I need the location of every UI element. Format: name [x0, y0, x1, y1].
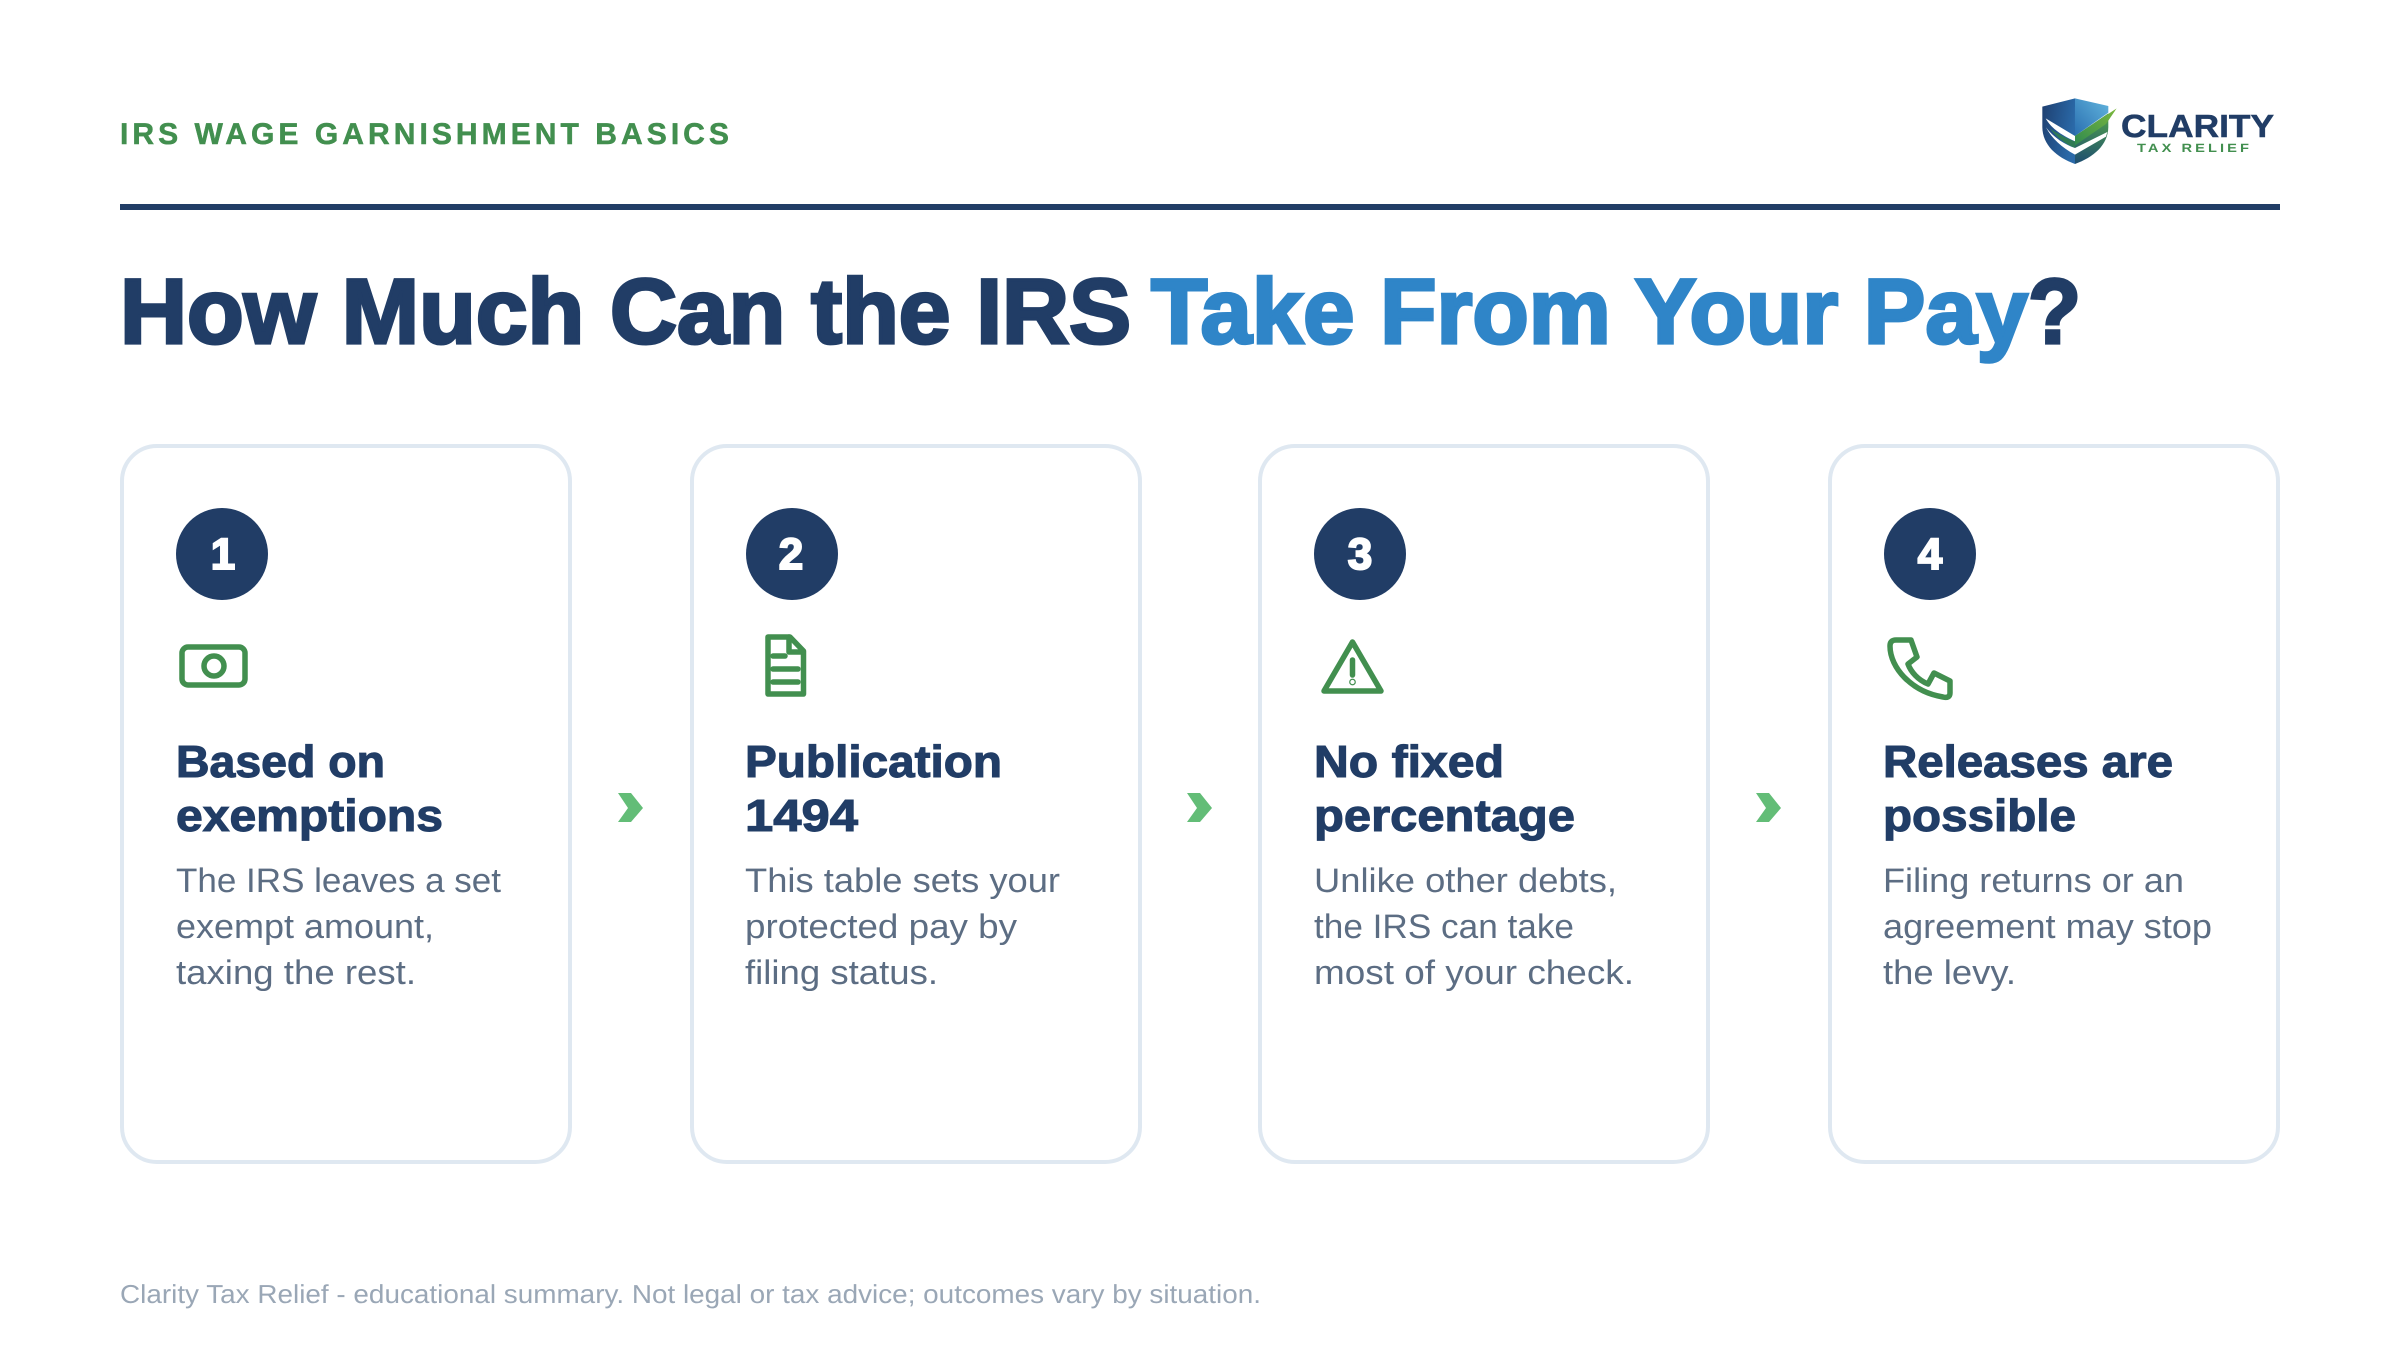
heading: publication 1494: 1494 — [745, 790, 858, 841]
step number 1 — [176, 508, 268, 600]
heading: releases are possible — [1883, 736, 2173, 841]
body text: taxing the rest. — [176, 954, 416, 992]
step number 3: 3 — [1348, 530, 1372, 579]
step number 4 — [1884, 508, 1976, 600]
body text: exempt amount, — [176, 908, 434, 946]
body text: most of your check. — [1314, 954, 1634, 992]
heading: releases are possible: possible — [1883, 790, 2076, 841]
title: ? — [2028, 261, 2081, 363]
body text — [1314, 862, 1634, 992]
arrow 2 — [1187, 793, 1212, 822]
heading: no fixed percentage: No fixed — [1314, 736, 1504, 787]
step number 3 — [1314, 508, 1406, 600]
title: How Much Can the IRS — [120, 261, 1131, 363]
arrow 3 — [1756, 793, 1781, 822]
panel: step 2 — [692, 446, 1140, 1162]
body text: protected pay by — [745, 908, 1017, 946]
title: Take From Your Pay — [1151, 261, 2028, 363]
body text: Filing returns or an — [1883, 862, 2184, 900]
title — [120, 261, 2081, 363]
heading: publication 1494: Publication — [745, 736, 1002, 787]
body text — [1883, 862, 2212, 992]
logo tagline: TAX RELIEF — [2137, 141, 2252, 155]
body text — [176, 862, 502, 992]
body text: Unlike other debts, — [1314, 862, 1617, 900]
heading: based on exemptions: exemptions — [176, 790, 443, 841]
panel: step 3 — [1260, 446, 1708, 1162]
body text — [745, 862, 1060, 992]
heading: based on exemptions: Based on — [176, 736, 385, 787]
body text: the levy. — [1883, 954, 2016, 992]
step number 1: 1 — [211, 530, 235, 579]
step number 2: 2 — [779, 530, 803, 579]
heading: releases are possible: Releases are — [1883, 736, 2173, 787]
step number 4: 4 — [1918, 530, 1943, 579]
footer disclaimer: Clarity Tax Relief - educational summary. Not legal or tax advice; outcomes vary by situation. — [120, 1279, 1261, 1309]
icon: document — [768, 637, 804, 694]
panel: step 1 — [122, 446, 570, 1162]
body text: This table sets your — [745, 862, 1060, 900]
icon: banknote — [182, 647, 245, 685]
icon: warning triangle — [1324, 642, 1381, 691]
heading: no fixed percentage: percentage — [1314, 790, 1575, 841]
eyebrow heading: IRS WAGE GARNISHMENT BASICS — [120, 118, 733, 151]
arrow 1 — [618, 793, 643, 822]
icon: shield with check — [2042, 98, 2117, 164]
body text: filing status. — [745, 954, 938, 992]
heading: no fixed percentage — [1314, 736, 1575, 841]
logo wordmark: CLARITY — [2121, 108, 2274, 144]
icon: phone — [1890, 640, 1950, 697]
body text: the IRS can take — [1314, 908, 1574, 946]
body text: agreement may stop — [1883, 908, 2212, 946]
header rule — [120, 204, 2280, 210]
body text: The IRS leaves a set — [176, 862, 502, 900]
heading: based on exemptions — [176, 736, 443, 841]
logo: Clarity Tax Relief — [2042, 98, 2274, 164]
panel: step 4 — [1830, 446, 2278, 1162]
heading: publication 1494 — [745, 736, 1002, 841]
step number 2 — [746, 508, 838, 600]
